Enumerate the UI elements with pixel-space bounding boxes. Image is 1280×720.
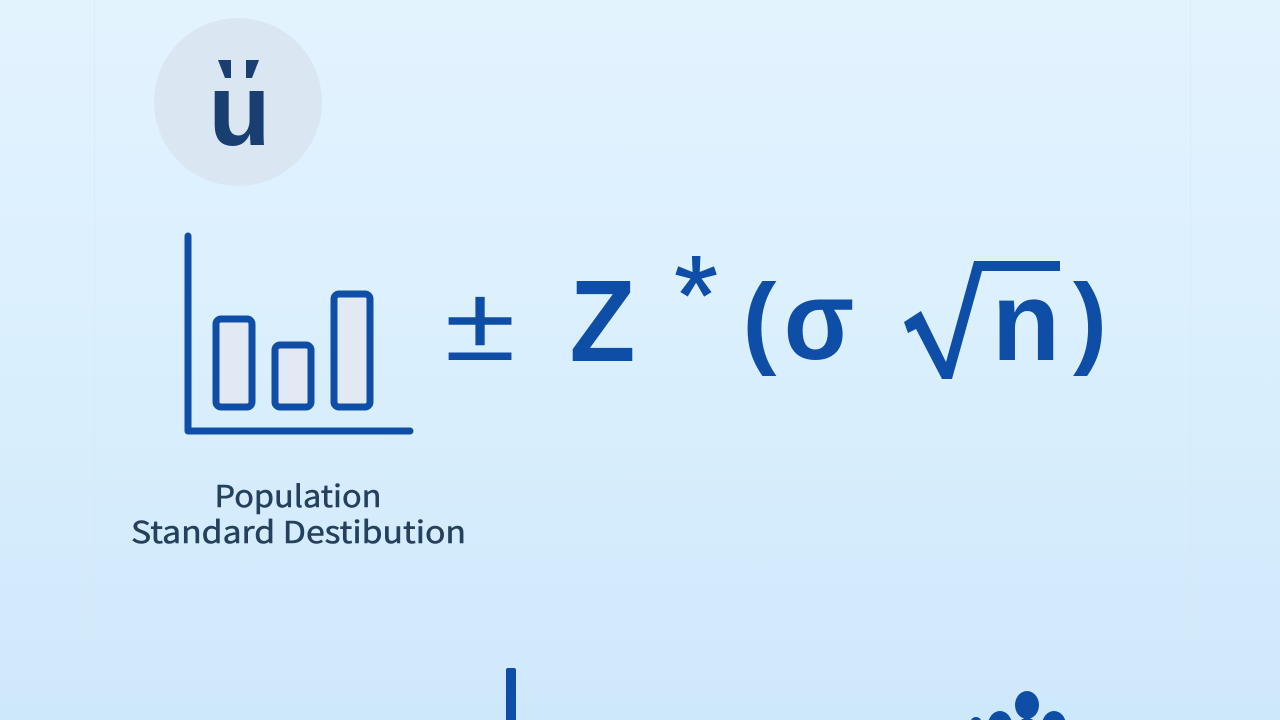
square root sign — [904, 261, 1060, 379]
bar chart icon: population distribution — [188, 236, 410, 431]
icon: circular badge with letter — [154, 18, 322, 186]
n: n — [992, 259, 1060, 384]
label: population standard distribution — [131, 472, 466, 552]
chart axes — [188, 236, 410, 431]
icon: circular badge with letter: u — [208, 53, 271, 167]
label: population standard distribution: Population — [214, 472, 382, 516]
icon: cluster of people dots at bottom edge — [970, 691, 1066, 720]
asterisk: * — [674, 233, 718, 358]
chart bars — [216, 294, 370, 407]
Z: Z — [570, 256, 635, 386]
sigma: σ — [784, 258, 854, 383]
cropped axis at bottom edge — [506, 668, 516, 720]
formula: plus-minus Z times sigma over root n — [445, 233, 1107, 386]
label: population standard distribution: Standard Destibution — [131, 508, 466, 552]
opening parenthesis: ( — [743, 263, 777, 377]
plus-minus sign: ± — [445, 265, 515, 383]
closing parenthesis: ) — [1073, 263, 1107, 377]
